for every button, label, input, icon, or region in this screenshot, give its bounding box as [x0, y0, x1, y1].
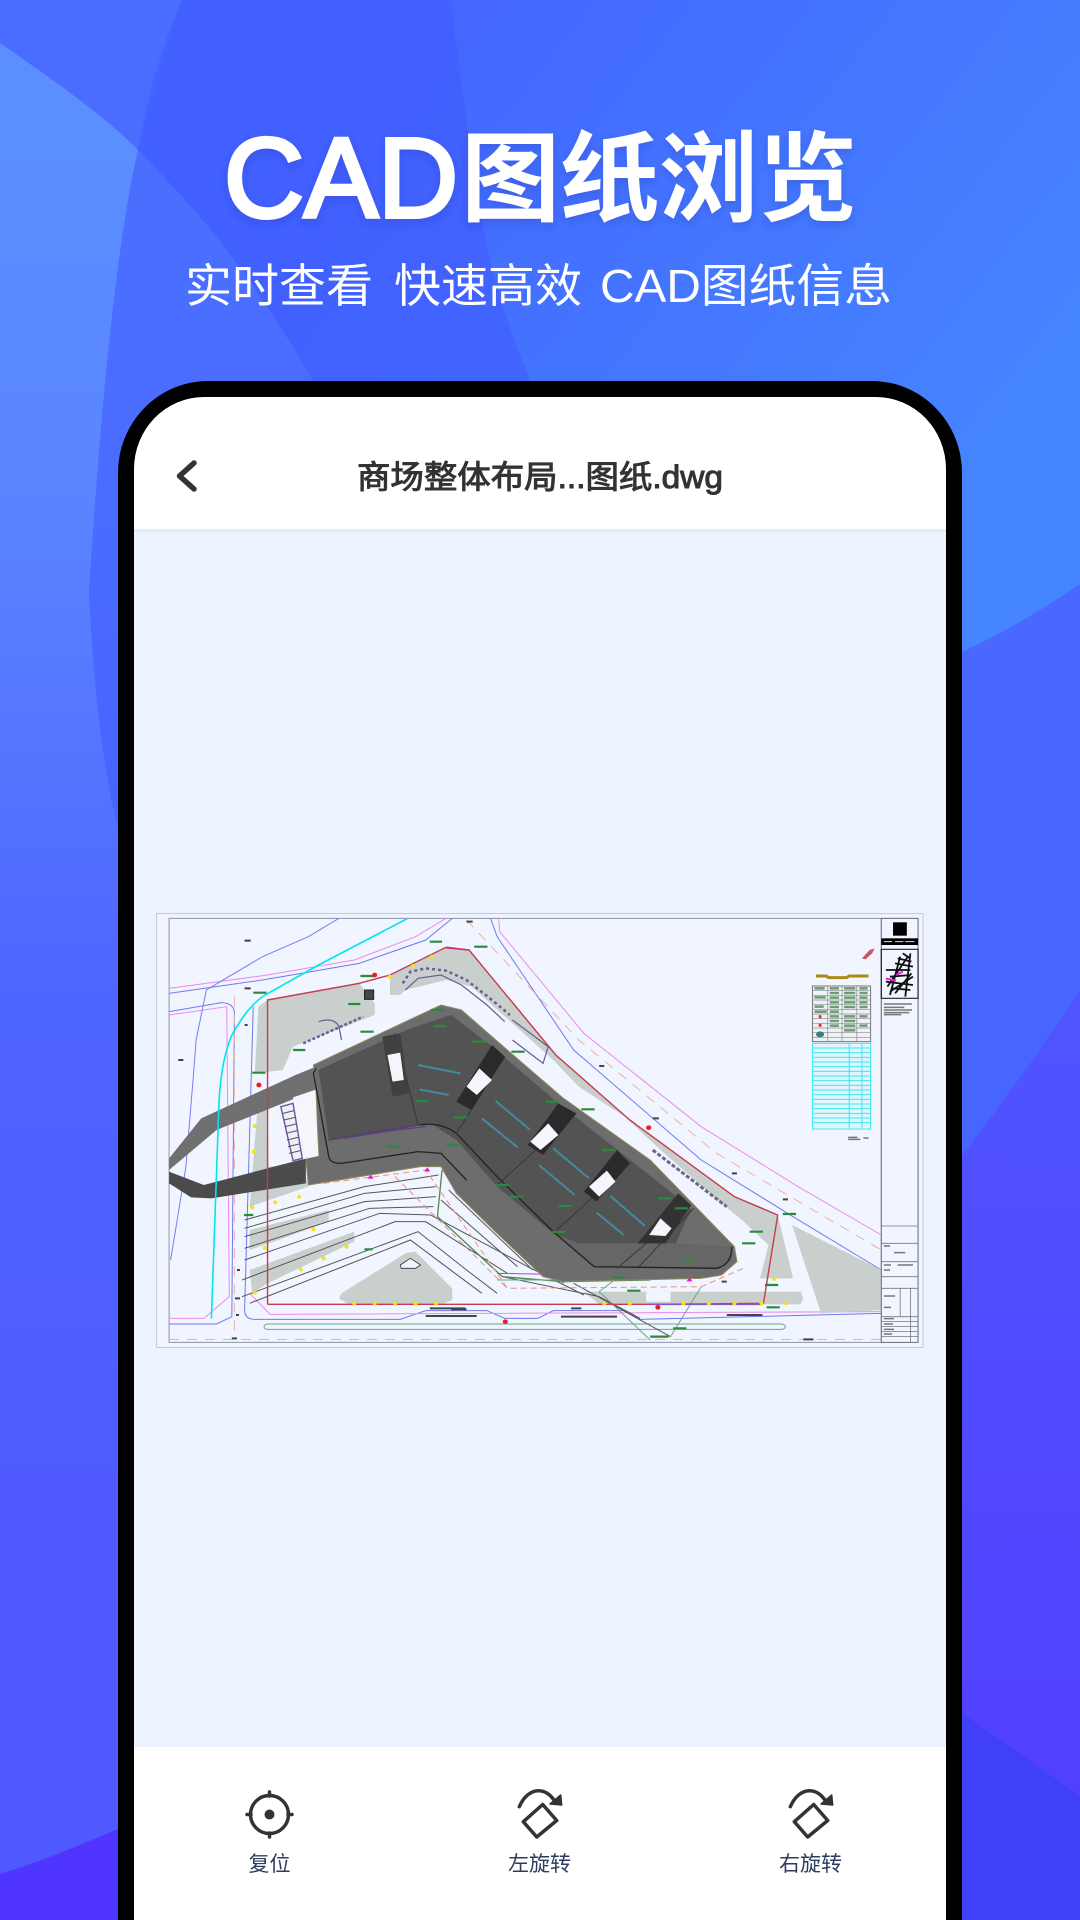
yellow markers	[250, 955, 788, 1305]
white court with parking	[281, 1090, 319, 1161]
skylight strips	[418, 1065, 645, 1235]
subtitle: CAD图纸信息	[600, 260, 892, 312]
scale note	[848, 1137, 869, 1139]
title block	[881, 918, 918, 1342]
phone mockup	[118, 381, 962, 1920]
contour lines	[242, 1170, 747, 1340]
subtitle: 实时查看	[185, 250, 373, 316]
subtitle: 快速高效	[394, 250, 582, 316]
button: rotate right	[779, 1791, 842, 1878]
green annotation labels	[244, 942, 796, 1337]
button: rotate left: 左旋转	[508, 1848, 571, 1878]
site boundary	[268, 947, 778, 1304]
button: rotate right: 右旋转	[779, 1848, 842, 1878]
toolbar	[247, 1791, 842, 1878]
button: reset	[247, 1792, 292, 1878]
phone frame	[118, 381, 962, 1920]
legend table	[812, 986, 871, 1042]
drawing sheet	[156, 913, 923, 1348]
road and boundary lines	[169, 918, 881, 1340]
red markers	[256, 973, 660, 1324]
title: 图纸浏览	[461, 100, 857, 242]
screen	[134, 397, 946, 1920]
cyan utility line	[211, 918, 408, 1318]
icon: rotate arrow	[519, 1791, 562, 1837]
section bar	[816, 976, 869, 978]
subtitle	[185, 250, 892, 316]
building: ramps and main body	[169, 1005, 737, 1282]
CAD drawing	[156, 913, 923, 1348]
north arrow	[862, 948, 875, 959]
header file name: 商场整体布局...图纸.dwg	[357, 459, 723, 495]
atriums	[382, 1033, 691, 1243]
icon: rotate arrow	[790, 1791, 833, 1837]
magenta markers	[368, 1167, 693, 1281]
title: CAD	[224, 115, 458, 241]
icon: target	[247, 1792, 292, 1837]
cyan schedule table	[812, 1043, 871, 1129]
button: rotate left	[508, 1791, 571, 1878]
parking rows	[303, 968, 727, 1207]
title	[224, 100, 857, 242]
button: reset: 复位	[248, 1848, 290, 1878]
icon: back chevron	[180, 463, 194, 489]
black annotation labels	[178, 922, 813, 1339]
landscape areas	[250, 948, 881, 1313]
